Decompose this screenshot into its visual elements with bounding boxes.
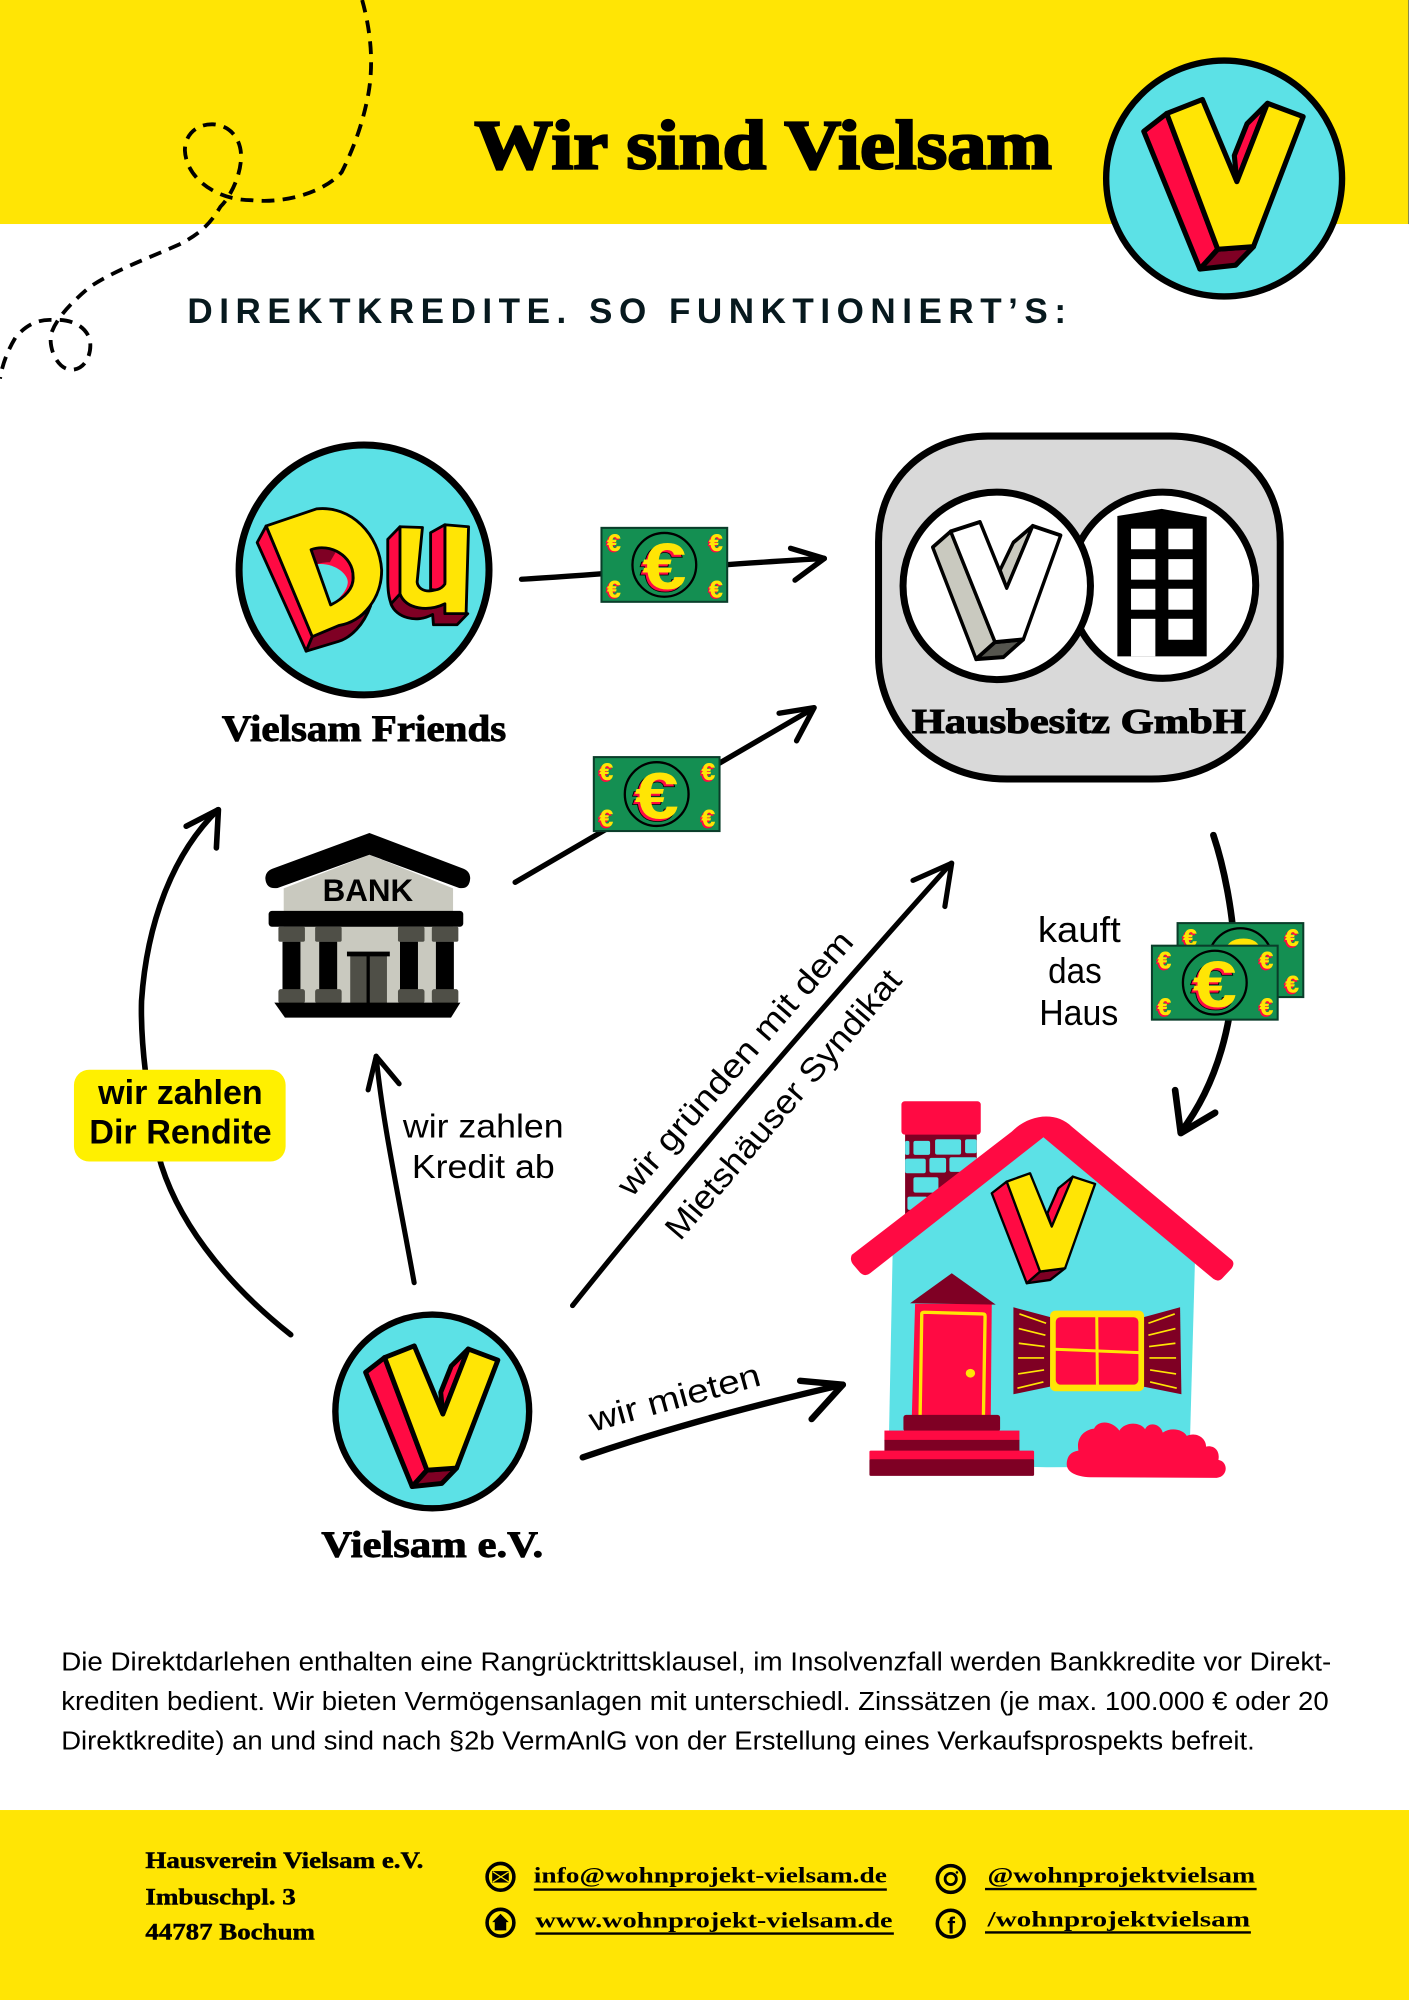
illustration: house	[851, 1101, 1233, 1478]
money bill: Friends: €	[708, 578, 722, 605]
money bills: stacked pair: €	[1182, 926, 1196, 953]
text block: legal note	[61, 1648, 1331, 1755]
money bills: stacked pair: €	[1156, 995, 1170, 1022]
money bill: Bank: €	[598, 807, 612, 834]
label: Vielsam e.V.: Vielsam e.V.	[321, 1524, 543, 1565]
icon: bank building	[265, 833, 470, 1018]
money bills: stacked pair	[1152, 923, 1303, 1024]
money bill: Friends: €	[606, 578, 620, 605]
money bills: stacked pair: €	[1156, 949, 1170, 976]
link: facebook: /wohnprojektvielsam	[986, 1908, 1250, 1932]
money bill: Friends	[601, 528, 727, 606]
money bill: Bank: €	[700, 807, 714, 834]
dashed flight path	[0, 0, 371, 379]
money bill: Bank: €	[700, 760, 714, 787]
footer band	[0, 1810, 1409, 2000]
money bills: stacked pair: €	[1284, 926, 1298, 953]
door	[910, 1273, 996, 1418]
arrow: Hausbesitz buys house	[1175, 835, 1234, 1133]
label: Vielsam Friends: Vielsam Friends	[222, 708, 506, 749]
chimney	[901, 1101, 981, 1217]
logo: header V badge	[1106, 61, 1342, 296]
arrow: Vielsam repays bank	[368, 1056, 414, 1283]
money bills: stacked pair: €	[1193, 947, 1237, 1021]
money bills: stacked pair: €	[1285, 925, 1299, 952]
icon: grey V circle	[903, 492, 1090, 680]
text block: legal note: Direktkredite) an und sind nach §2b VermAnlG von der Erstellung eines Verkaufsprospekts befreit.	[61, 1727, 1255, 1755]
money bill: Friends: €	[607, 530, 621, 557]
window	[1013, 1307, 1181, 1394]
money bill: Bank: €	[635, 759, 679, 833]
node: Vielsam Friends	[222, 445, 506, 749]
icon: Du lettering	[257, 509, 469, 651]
arrow: Friends to Hausbesitz	[522, 548, 824, 580]
money bills: stacked pair: €	[1260, 994, 1274, 1021]
money bill: Friends: €	[709, 576, 723, 603]
money bill: Friends: €	[607, 576, 621, 603]
callout: wir zahlen Dir Rendite: Dir Rendite	[89, 1114, 272, 1152]
label: wir zahlen Kredit ab: Kredit ab	[412, 1148, 555, 1186]
money bills: stacked pair: €	[1258, 949, 1272, 976]
link: instagram: @wohnprojektvielsam	[987, 1864, 1255, 1888]
money bills: stacked pair: €	[1260, 948, 1274, 975]
walls	[888, 1130, 1195, 1467]
footer address	[145, 1848, 423, 1944]
money bill: Bank: €	[600, 759, 614, 786]
icon: building circle	[1070, 492, 1256, 678]
bush	[1067, 1423, 1226, 1478]
icon: instagram	[937, 1866, 964, 1892]
node: Vielsam e.V.	[321, 1315, 543, 1565]
icon: home	[487, 1909, 514, 1936]
footer address: Imbuschpl. 3	[145, 1884, 296, 1909]
label: kauft das Haus	[1038, 910, 1121, 1033]
label: wir gründen mit dem Mietshäuser Syndikat: wir gründen mit dem	[609, 924, 861, 1204]
arrow: Vielsam pays return to Friends	[141, 810, 291, 1335]
text block: legal note: Die Direktdarlehen enthalten eine Rangrücktrittsklausel, im Insolvenzfall werden Bankkredite vor Direkt-	[61, 1648, 1331, 1676]
text block: legal note: krediten bedient. Wir bieten Vermögensanlagen mit unterschiedl. Zinssätzen (je max. 100.000 € oder 20	[61, 1688, 1329, 1716]
steps	[869, 1415, 1034, 1476]
money bill: Bank: €	[702, 806, 716, 833]
label: wir gründen mit dem Mietshäuser Syndikat: Mietshäuser Syndikat	[658, 962, 909, 1247]
arrow: Bank to Hausbesitz	[515, 708, 814, 882]
icon: facebook	[937, 1910, 964, 1939]
arrow: Vielsam founds GmbH	[573, 863, 952, 1306]
footer address: 44787 Bochum	[145, 1919, 315, 1944]
money bills: stacked pair: €	[1218, 925, 1263, 999]
label: wir mieten: wir mieten	[584, 1357, 765, 1440]
money bills: stacked pair: €	[1285, 972, 1299, 999]
label: kauft das Haus: das	[1048, 951, 1102, 991]
callout: wir zahlen Dir Rendite	[74, 1070, 286, 1162]
money bill: Bank: €	[702, 759, 716, 786]
money bills: stacked pair: €	[1284, 973, 1298, 1000]
footer address: Hausverein Vielsam e.V.	[145, 1848, 423, 1873]
money bill: Bank	[594, 757, 720, 835]
money bill: Friends: €	[606, 531, 620, 558]
label: Hausbesitz GmbH: Hausbesitz GmbH	[912, 703, 1246, 741]
header band	[0, 0, 1409, 224]
roof	[851, 1116, 1233, 1281]
callout: wir zahlen Dir Rendite: wir zahlen	[97, 1074, 263, 1112]
money bills: stacked pair: €	[1158, 948, 1172, 975]
label: wir zahlen Kredit ab	[402, 1107, 564, 1186]
money bills: stacked pair: €	[1190, 950, 1234, 1024]
money bill: Friends: €	[642, 529, 686, 604]
arrow: wir mieten	[583, 1381, 843, 1457]
house V logo	[992, 1173, 1095, 1283]
money bill: Bank: €	[598, 760, 612, 787]
subtitle: DIREKTKREDITE. SO FUNKTIONIERT’S:	[187, 292, 1066, 331]
label: wir gründen mit dem Mietshäuser Syndikat	[609, 924, 909, 1247]
label: kauft das Haus: kauft	[1038, 910, 1121, 950]
money bills: stacked pair: €	[1158, 994, 1172, 1021]
money bill: Friends: €	[708, 531, 722, 558]
link: email: info@wohnprojekt-vielsam.de	[534, 1864, 887, 1888]
money bill: Bank: €	[600, 806, 614, 833]
money bill: Bank: €	[632, 761, 676, 835]
money bill: Friends: €	[709, 530, 723, 557]
icon: bank building: BANK	[323, 873, 414, 908]
title: Wir sind Vielsam	[474, 107, 1052, 184]
label: wir zahlen Kredit ab: wir zahlen	[402, 1107, 564, 1145]
money bills: stacked pair: €	[1183, 925, 1197, 952]
link: website: www.wohnprojekt-vielsam.de	[536, 1908, 893, 1932]
money bill: Friends: €	[640, 532, 684, 606]
node: Hausbesitz GmbH	[879, 436, 1280, 779]
icon: mail	[487, 1863, 514, 1890]
money bills: stacked pair: €	[1258, 995, 1272, 1022]
icon: facebook: f	[947, 1913, 955, 1939]
label: kauft das Haus: Haus	[1039, 993, 1118, 1033]
